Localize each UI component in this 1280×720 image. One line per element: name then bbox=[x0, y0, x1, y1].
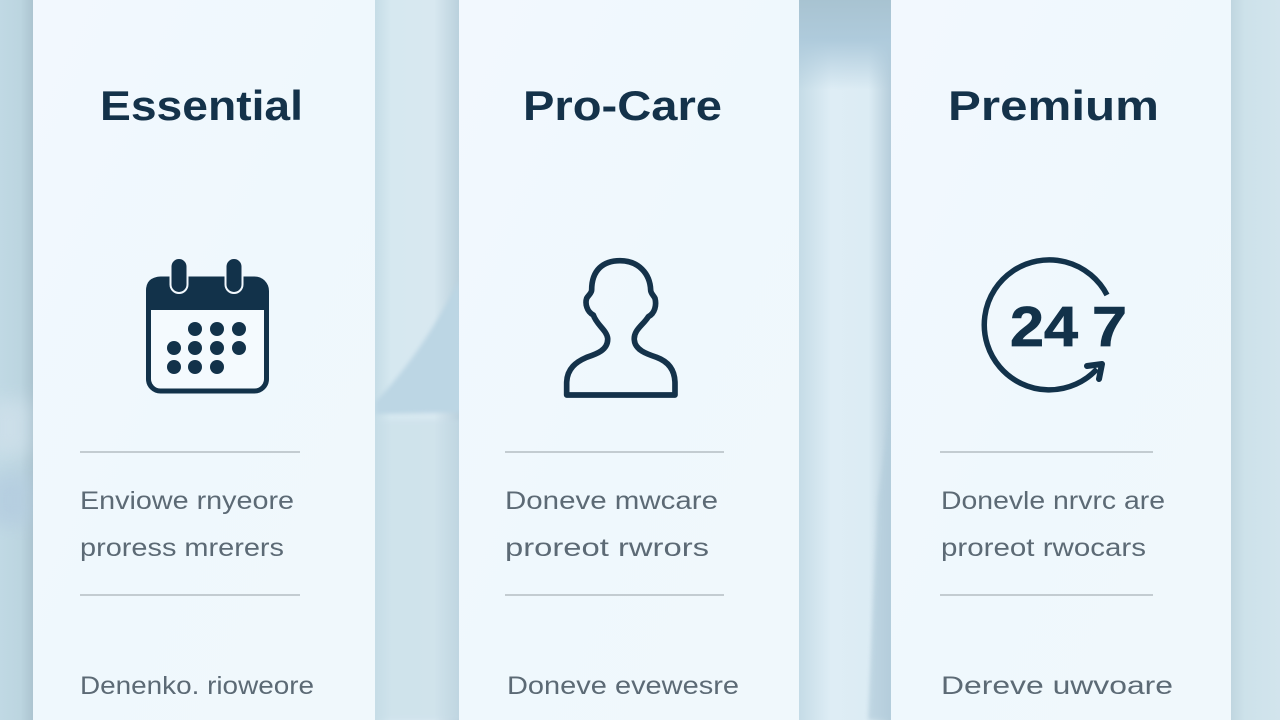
icon: calendar bbox=[146, 258, 268, 391]
text block: Pro-Care description: proreot rwrors bbox=[505, 534, 709, 562]
heading: Essential: Essential bbox=[100, 82, 303, 129]
text block: Pro-Care description bbox=[505, 487, 718, 562]
text block: Premium footer: Dereve uwvoare bbox=[941, 672, 1173, 700]
panel: Premium bbox=[891, 0, 1231, 720]
icon: person bbox=[567, 261, 675, 395]
text block: Premium description bbox=[941, 487, 1165, 562]
icon: 24/7 clock bbox=[984, 260, 1127, 390]
heading: Pro-Care: Pro-Care bbox=[523, 82, 722, 129]
heading: Premium: Premium bbox=[948, 82, 1159, 129]
text block: Essential footer: Denenko. rioweore bbox=[80, 672, 314, 700]
panel: Pro-Care bbox=[459, 0, 799, 720]
text block: Pro-Care description: Doneve mwcare bbox=[505, 487, 718, 515]
text block: Premium description: Donevle nrvrc are bbox=[941, 487, 1165, 515]
icon: 24/7 clock: 7 bbox=[1092, 295, 1127, 359]
text block: Pro-Care footer: Doneve evewesre bbox=[507, 672, 739, 700]
text block: Essential description: Enviowe rnyeore bbox=[80, 487, 294, 515]
text block: Essential description bbox=[80, 487, 294, 562]
text block: Premium description: proreot rwocars bbox=[941, 534, 1146, 562]
text block: Essential description: proress mrerers bbox=[80, 534, 284, 562]
icon: 24/7 clock: 24 bbox=[1010, 295, 1078, 359]
panel: Essential bbox=[33, 0, 375, 720]
